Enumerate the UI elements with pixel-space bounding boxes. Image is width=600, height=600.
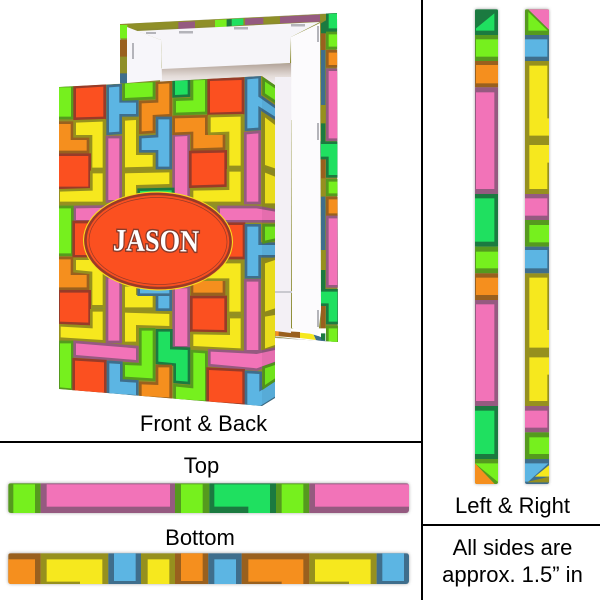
right edge strip bbox=[525, 9, 549, 486]
staples bbox=[132, 24, 319, 327]
note: all sides approx 1.5 in: All sides are bbox=[453, 535, 572, 560]
front face of canvas with tile pattern bbox=[59, 76, 275, 406]
label: left and right: Left & Right bbox=[455, 493, 570, 518]
top edge strip bbox=[8, 483, 409, 513]
inner stretcher frame and white flaps bbox=[127, 22, 321, 336]
note: all sides approx 1.5 in: approx. 1.5” in bbox=[442, 562, 583, 587]
label: front and back: Front & Back bbox=[140, 411, 268, 436]
name plate oval bbox=[82, 190, 234, 292]
bottom edge strip bbox=[8, 553, 409, 584]
label: bottom: Bottom bbox=[165, 525, 235, 550]
left edge strip bbox=[475, 9, 498, 485]
name text: JASON bbox=[113, 222, 199, 259]
note: all sides approx 1.5 in bbox=[442, 535, 583, 587]
back panel of canvas with wrapped edges bbox=[120, 13, 338, 343]
label: top: Top bbox=[184, 453, 219, 478]
